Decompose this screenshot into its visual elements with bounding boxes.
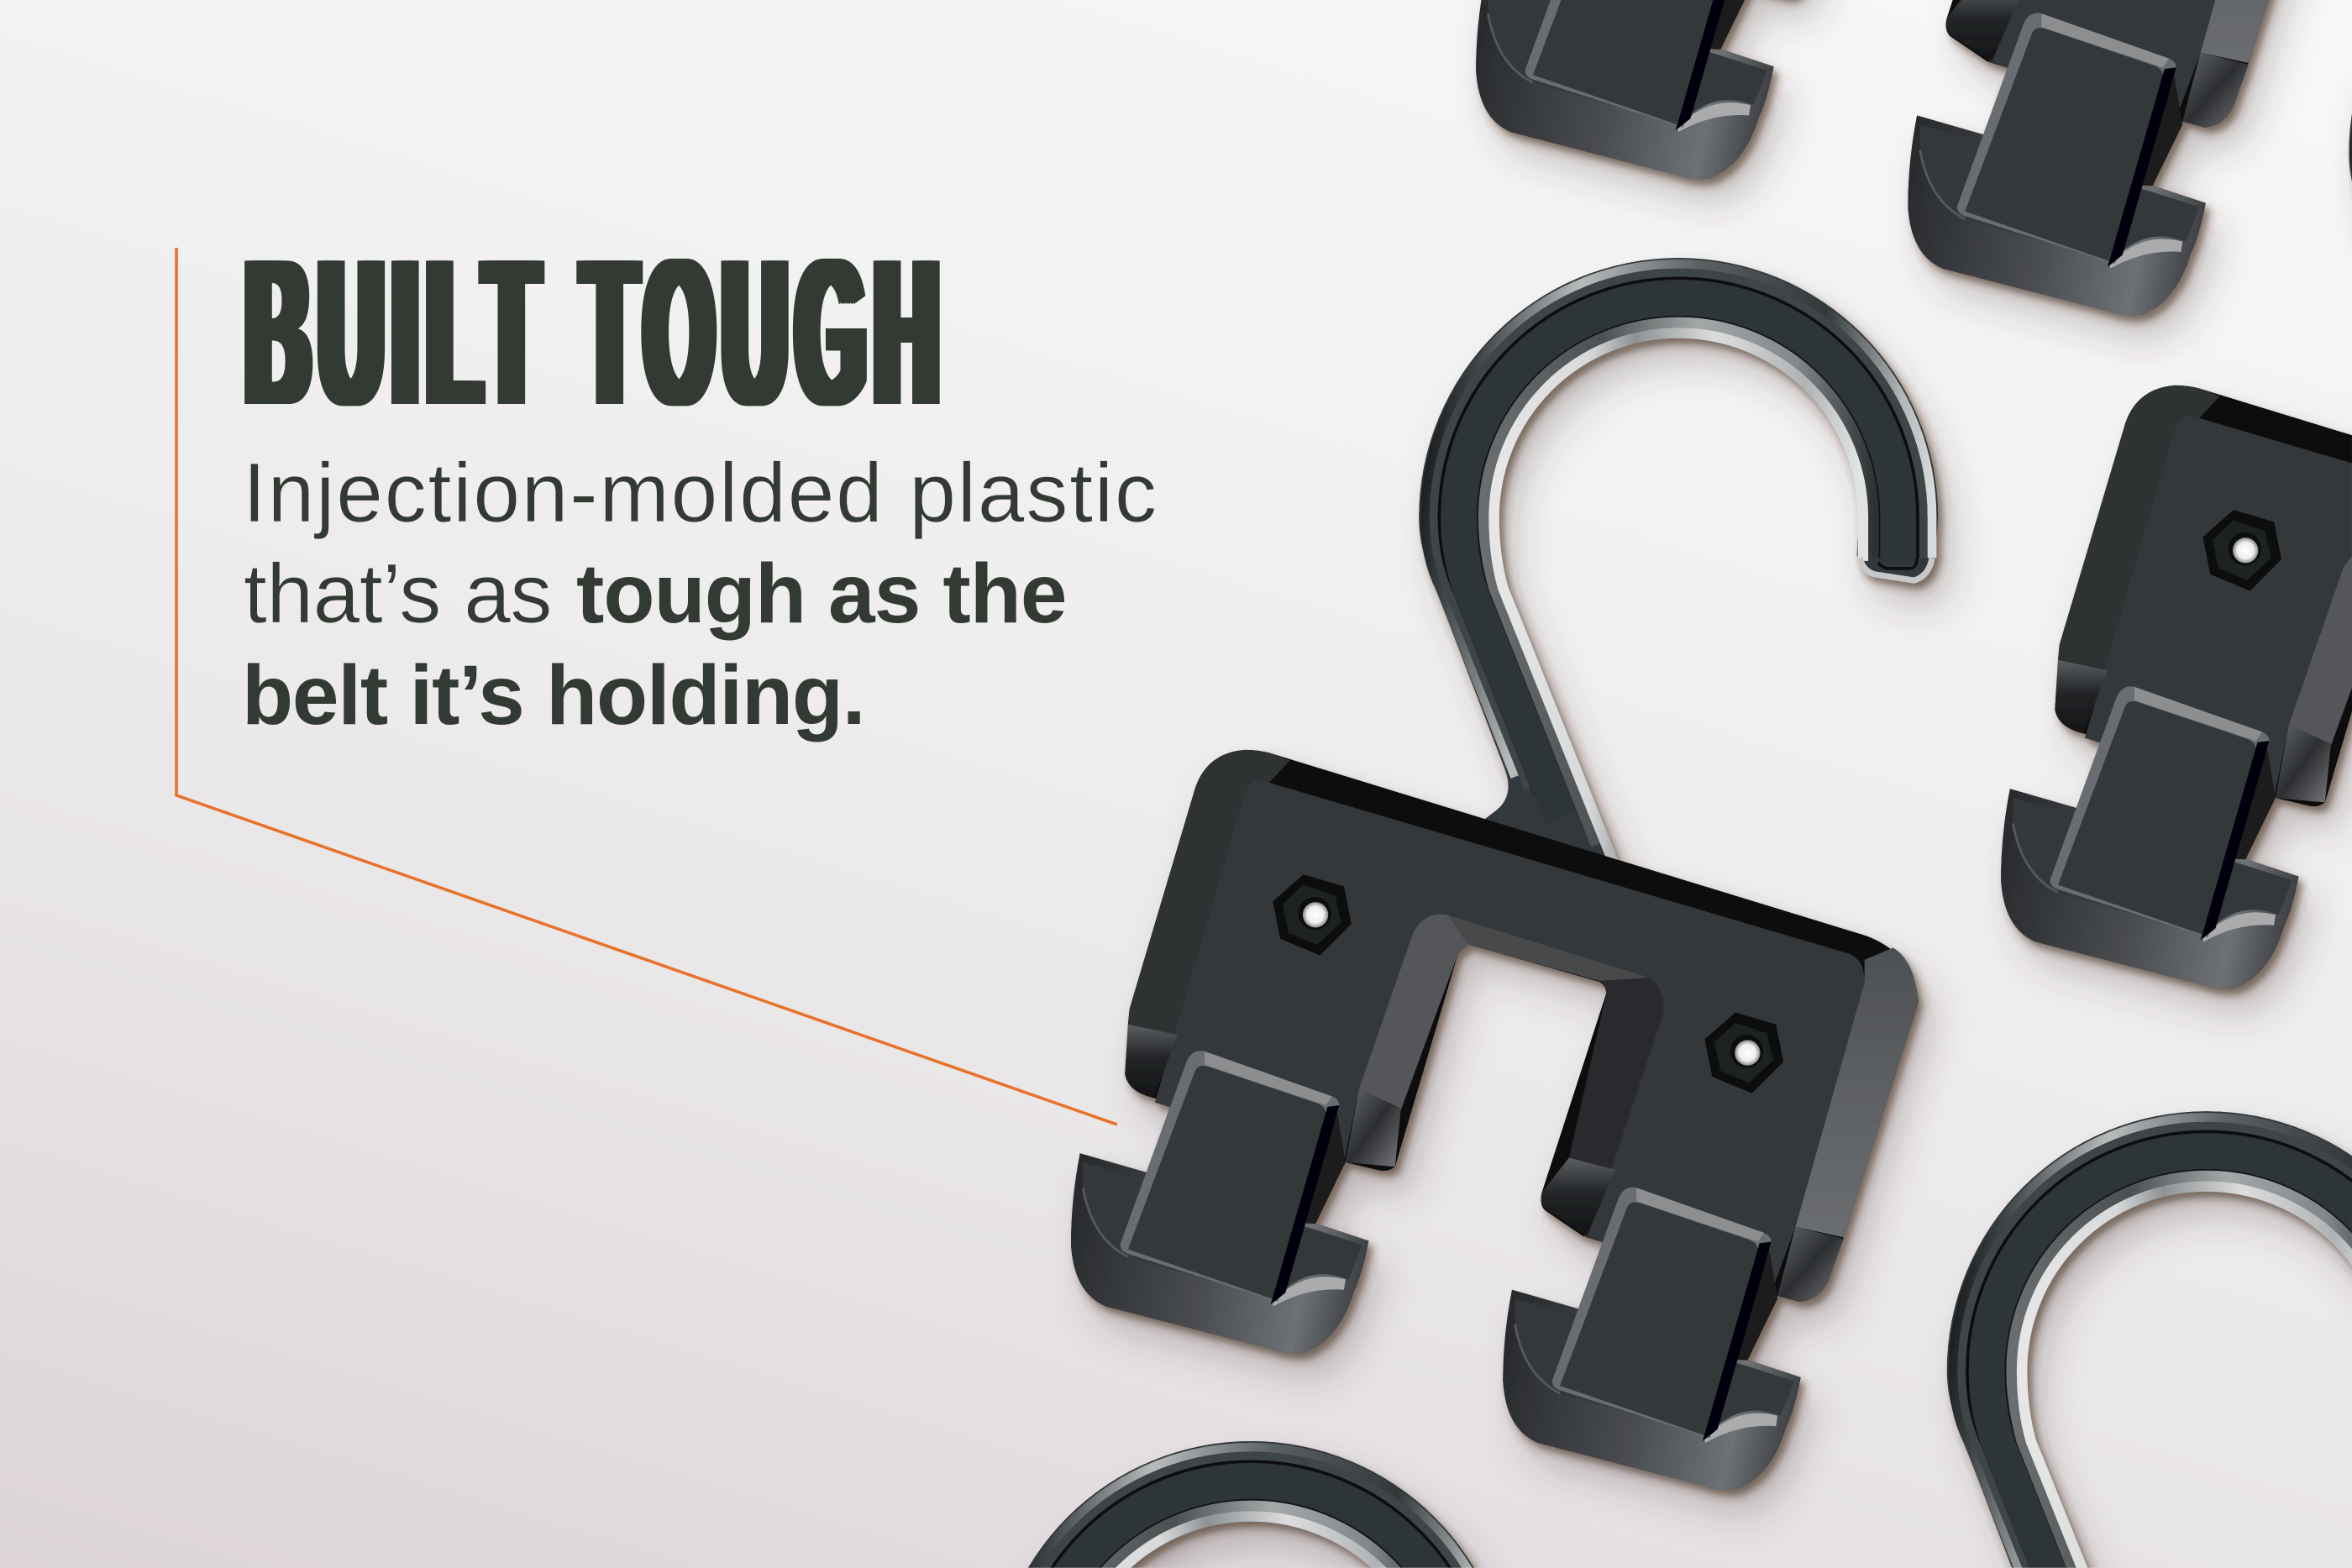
body line 3 bold: belt it’s holding. (242, 648, 864, 742)
orange callout line (176, 248, 1117, 1125)
hooks scene (643, 0, 2352, 1568)
main belt hook (1071, 258, 1938, 1490)
body line 2 regular: that’s as (244, 547, 552, 641)
hook bottom right, cropped (1944, 1111, 2352, 1568)
hook top, cropped (1472, 0, 2313, 358)
hook right, cropped (1998, 106, 2352, 1030)
hook bottom centre, cropped (1028, 1441, 1495, 1568)
body text (242, 446, 1158, 742)
body line 1: Injection-molded plastic (243, 446, 1158, 540)
body line 2 bold: tough as the (576, 547, 1067, 641)
title: BUILT TOUGH (246, 215, 948, 448)
